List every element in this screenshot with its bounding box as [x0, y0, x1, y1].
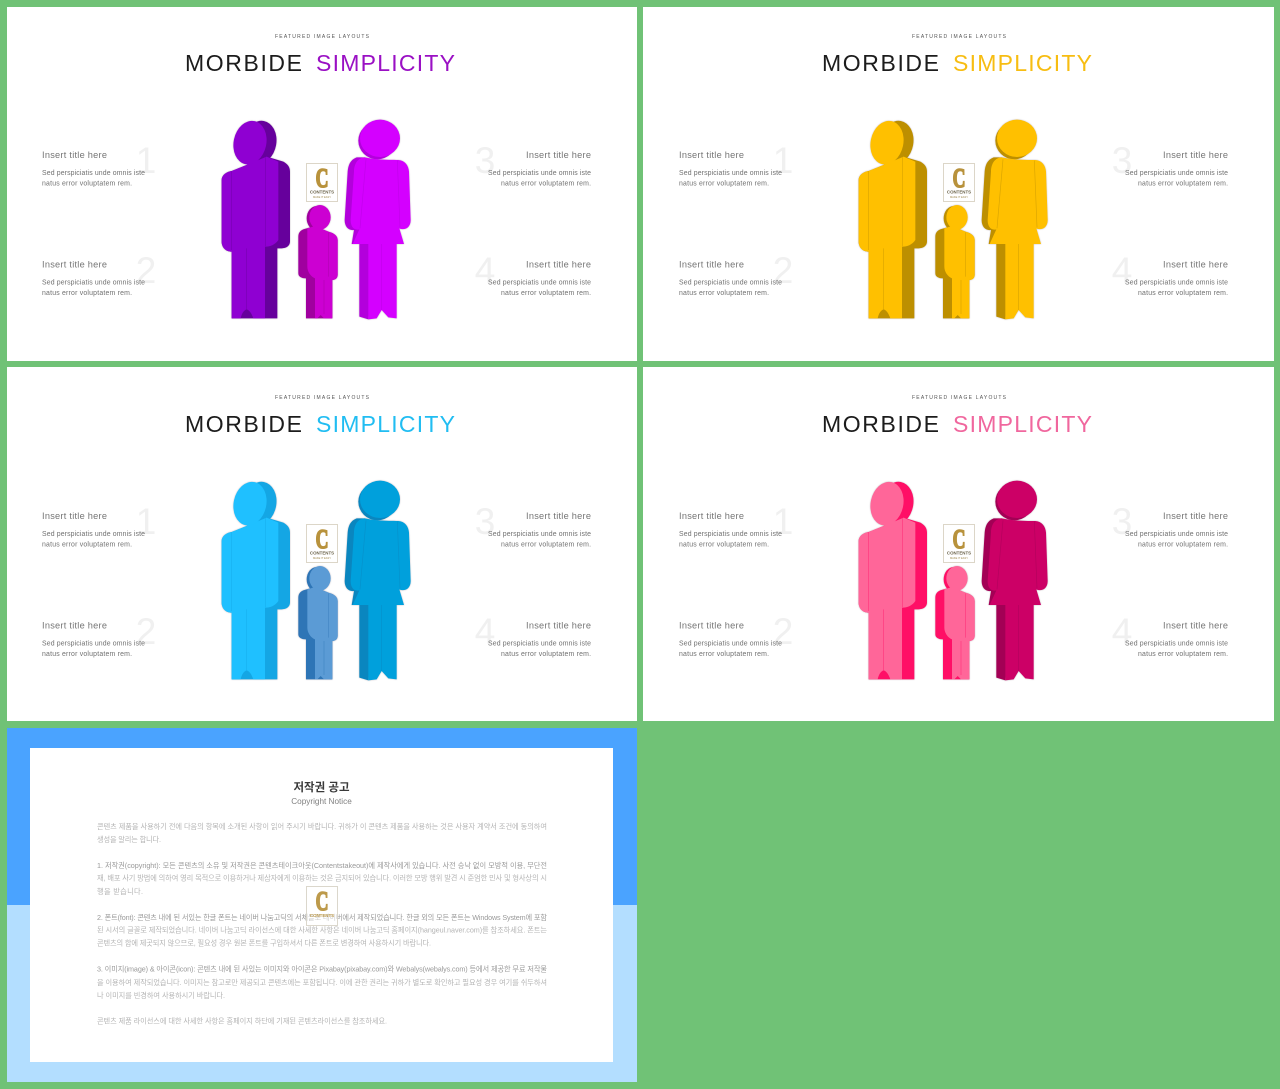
figure: woman	[982, 120, 1048, 319]
text block 3: Insert title here	[526, 511, 591, 521]
text block 3: Sed perspiciatis unde omnis iste	[488, 531, 591, 538]
numeral 4: 4	[475, 250, 495, 291]
text block 4: natus error voluptatem rem.	[501, 290, 591, 297]
text block 2: Sed perspiciatis unde omnis iste	[679, 640, 782, 648]
text block 3: natus error voluptatem rem.	[1138, 180, 1228, 188]
title	[185, 411, 455, 437]
eyebrow label: FEATURED IMAGE LAYOUTS	[275, 395, 370, 401]
text block 1: Sed perspiciatis unde omnis iste	[42, 170, 145, 177]
numeral 4: 4	[1112, 611, 1132, 652]
text block 1	[42, 511, 145, 548]
figure: woman	[345, 481, 411, 680]
text block 1	[42, 150, 145, 188]
heading: copyright notice: 저작권 공고	[293, 780, 350, 794]
text block 1: Sed perspiciatis unde omnis iste	[679, 170, 782, 177]
title: SIMPLICITY	[953, 411, 1092, 437]
text block 4	[488, 260, 591, 297]
numeral 3: 3	[475, 501, 495, 542]
text block 3: Insert title here	[1163, 511, 1228, 521]
numeral 1: 1	[773, 140, 793, 181]
figure: man	[859, 118, 927, 318]
text block 3: Sed perspiciatis unde omnis iste	[488, 170, 591, 177]
panel: copyright notice	[7, 728, 637, 1082]
text block 2: natus error voluptatem rem.	[679, 290, 769, 297]
numeral 2: 2	[773, 611, 793, 652]
logo	[944, 163, 974, 202]
text block 4	[1125, 620, 1228, 658]
figure: man	[222, 118, 290, 318]
text block 2	[679, 260, 782, 297]
text block: copyright: 재, 배포 사기 방법에 의하여 영리 목적으로 이용하거나 제삼자에게 이용하는 것은 금지되어 있습니다. 이러한 모방 행위 발견 시 준엄한 민사 및 형사상의 시	[97, 874, 547, 882]
text block 2: natus error voluptatem rem.	[679, 651, 769, 658]
text block 1: Sed perspiciatis unde omnis iste	[679, 531, 782, 538]
title: MORBIDE	[185, 411, 302, 437]
title	[185, 50, 455, 76]
text block: images and icons: 나 이미지를 빈경하여 사용하시기 바랍니다.	[97, 991, 225, 1000]
text block 2: Sed perspiciatis unde omnis iste	[42, 640, 145, 648]
text block: introduction: 생성을 알리는 합니다.	[97, 835, 161, 844]
text block 2: Insert title here	[42, 260, 107, 270]
text block 3	[488, 511, 591, 548]
text block 3: Insert title here	[526, 150, 591, 160]
eyebrow label: FEATURED IMAGE LAYOUTS	[912, 395, 1007, 401]
text block 4: Sed perspiciatis unde omnis iste	[488, 280, 591, 286]
title: MORBIDE	[822, 50, 939, 76]
text block 1	[679, 511, 782, 548]
text block: images and icons	[97, 964, 547, 1000]
text block: images and icons: 을 이용하여 제작되었습니다. 이미지는 참고로만 제공되고 콘텐츠에는 포함됩니다. 이에 관한 권리는 귀하가 별도로 확인하고 필요성 경우 여기를 쉬두하셔	[97, 978, 547, 987]
text block 1	[679, 150, 782, 188]
text block: copyright: 1. 저작권(copyright): 모든 콘텐츠의 소유 및 저작권은 콘텐츠테이크아웃(Contentstakeout)에 제작사에게 있습니다. 사전 승낙 없이 모방적 이용, 무단전	[97, 861, 547, 870]
text block 3: natus error voluptatem rem.	[501, 542, 591, 548]
text block 3: Sed perspiciatis unde omnis iste	[1125, 170, 1228, 177]
numeral 3: 3	[475, 140, 495, 181]
text block 2: natus error voluptatem rem.	[42, 290, 132, 297]
text block 2: Sed perspiciatis unde omnis iste	[679, 280, 782, 286]
title	[822, 50, 1092, 76]
logo	[944, 524, 974, 562]
text block 2: natus error voluptatem rem.	[42, 651, 132, 658]
title: SIMPLICITY	[953, 50, 1092, 76]
logo: CONTENTS	[310, 913, 334, 918]
text block: copyright: 행을 받습니다.	[97, 887, 143, 896]
numeral 1: 1	[773, 501, 793, 542]
text block 4	[1125, 260, 1228, 297]
text block 1: Insert title here	[42, 150, 107, 160]
text block 2	[679, 620, 782, 658]
text block: font: 콘텐츠의 함에 제곳되지 않으므로, 필요성 경우 원본 폰트를 구입하셔서 다른 폰트로 변경하여 사용하시기 바랍니다.	[97, 938, 431, 948]
eyebrow label: FEATURED IMAGE LAYOUTS	[275, 34, 370, 40]
panel: yellow family slide	[643, 7, 1274, 361]
text block 3: natus error voluptatem rem.	[1138, 542, 1228, 548]
text block 3: Insert title here	[1163, 150, 1228, 160]
text block 1: Sed perspiciatis unde omnis iste	[42, 531, 145, 538]
heading: copyright notice: Copyright Notice	[291, 797, 352, 806]
text block 4: Sed perspiciatis unde omnis iste	[1125, 280, 1228, 286]
figure: child	[298, 566, 338, 679]
logo	[306, 886, 338, 926]
title: MORBIDE	[185, 50, 302, 76]
text block 1: natus error voluptatem rem.	[679, 180, 769, 188]
numeral 1: 1	[136, 501, 156, 542]
text block 1: natus error voluptatem rem.	[42, 180, 132, 188]
text block 4: Insert title here	[526, 260, 591, 270]
text block 4: Insert title here	[526, 620, 591, 630]
figure: woman	[982, 481, 1048, 680]
logo	[306, 163, 338, 202]
text block: font: 된 시서의 글꼴로 제작되었습니다. 네이버 나눔고딕 라이선스에 대한 사세한 사항은 네이버 나눔고딕 홈페이지(hangeul.naver.com)를 참조하세요. 폰트는	[97, 926, 547, 934]
text block 1: Insert title here	[679, 150, 744, 160]
text block 4: Sed perspiciatis unde omnis iste	[1125, 640, 1228, 648]
numeral 1: 1	[136, 140, 156, 181]
title: MORBIDE	[822, 411, 939, 437]
text block 2: Sed perspiciatis unde omnis iste	[42, 280, 145, 286]
text block 2: Insert title here	[679, 260, 744, 270]
panel: pink family slide	[643, 367, 1274, 721]
text block: introduction	[97, 822, 547, 844]
text block: font	[97, 913, 547, 948]
figure: man	[222, 479, 290, 679]
text block 2	[42, 620, 145, 658]
numeral 4: 4	[475, 611, 495, 652]
figure: child	[935, 205, 975, 318]
text block 1: Insert title here	[679, 511, 744, 521]
numeral 4: 4	[1112, 250, 1132, 291]
numeral 2: 2	[773, 250, 793, 291]
numeral 2: 2	[136, 250, 156, 291]
eyebrow label: FEATURED IMAGE LAYOUTS	[912, 34, 1007, 40]
text block: closing note: 콘텐츠 제품 라이선스에 대한 사세한 사항은 홈페이지 하단에 기재된 콘텐츠라이선스를 참조하세요.	[97, 1016, 387, 1026]
title: SIMPLICITY	[316, 411, 455, 437]
text block 1: Insert title here	[42, 511, 107, 521]
text block 4: Insert title here	[1163, 620, 1228, 630]
text block 4: natus error voluptatem rem.	[1138, 651, 1228, 658]
text block 4: natus error voluptatem rem.	[1138, 290, 1228, 297]
numeral 2: 2	[136, 611, 156, 652]
title: SIMPLICITY	[316, 50, 455, 76]
logo: C	[316, 886, 328, 916]
text block 4: natus error voluptatem rem.	[501, 651, 591, 658]
text block 4	[488, 620, 591, 658]
text block 4: Insert title here	[1163, 260, 1228, 270]
text block 1: natus error voluptatem rem.	[679, 542, 769, 548]
title	[822, 411, 1092, 437]
numeral 3: 3	[1112, 501, 1132, 542]
numeral 3: 3	[1112, 140, 1132, 181]
text block: images and icons: 3. 이미지(image) & 아이콘(icon): 콘텐츠 내에 된 사있는 이미지와 아이콘은 Pixabay(pixabay.com)와 Webalys(webalys.com) 등에서 제공한 무료 저작물	[97, 964, 547, 974]
text block 3: Sed perspiciatis unde omnis iste	[1125, 531, 1228, 538]
text block 4: Sed perspiciatis unde omnis iste	[488, 640, 591, 648]
figure: man	[859, 479, 927, 679]
text block: introduction: 콘텐츠 제품을 사용하기 전에 다음의 항목에 소개된 사항이 읽어 주시기 바랍니다. 귀하가 이 콘텐츠 제품을 사용하는 것은 사용자 계약서 조건에 동의하여	[97, 822, 547, 831]
text block 3	[1125, 511, 1228, 548]
text block 2: Insert title here	[42, 620, 107, 630]
panel: purple family slide	[7, 7, 637, 361]
text block 3: natus error voluptatem rem.	[501, 180, 591, 188]
figure: child	[935, 566, 975, 679]
text block 2	[42, 260, 145, 297]
text block 3	[488, 150, 591, 188]
heading: copyright notice	[291, 780, 352, 806]
text block 1: natus error voluptatem rem.	[42, 542, 132, 548]
panel: blue family slide	[7, 367, 637, 721]
text block 3	[1125, 150, 1228, 188]
text block: font: 2. 폰트(font): 콘텐츠 내에 된 서있는 한글 폰트는 네이버 나눔고딕의 서체들로 네이버에서 제작되었습니다. 한글 외의 모든 폰트는 Windows System에 포함	[97, 913, 547, 922]
text block: copyright	[97, 861, 547, 896]
figure: child	[298, 205, 338, 318]
text block 2: Insert title here	[679, 620, 744, 630]
figure: woman	[345, 120, 411, 319]
logo	[306, 524, 338, 562]
